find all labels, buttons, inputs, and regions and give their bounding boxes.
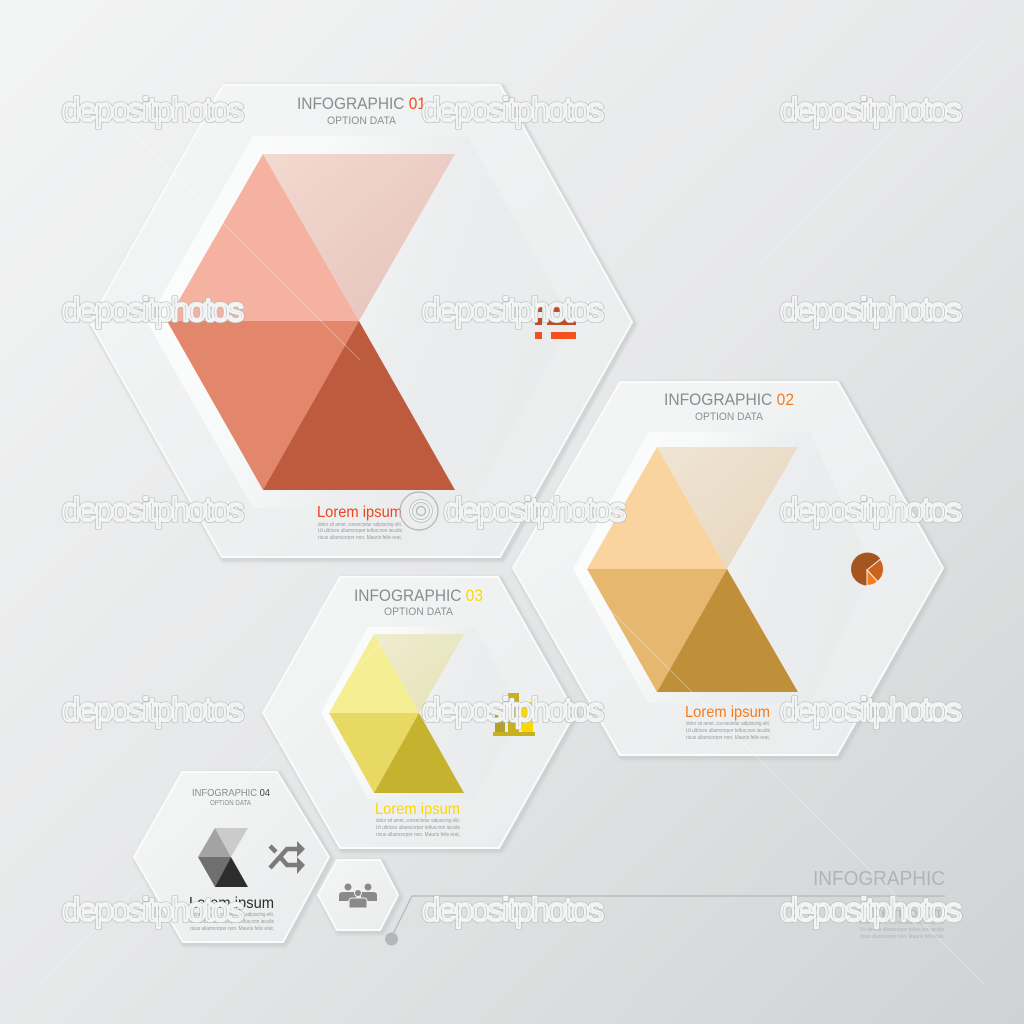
panel: infographic 01 [90, 85, 634, 559]
text block: infographic 01: risus ullamcorper non. Mauris felis erat, [318, 535, 402, 541]
icon: pie chart [851, 552, 884, 586]
panel: people hexagon [318, 860, 400, 932]
triangles: infographic 01 [167, 154, 455, 490]
subheading: infographic 02: OPTION DATA [695, 411, 764, 423]
heading: infographic 03: INFOGRAPHIC 03 [354, 586, 483, 605]
icon: shuffle arrows [270, 841, 305, 874]
text block: infographic 04 [189, 895, 274, 932]
subheading: infographic 01: OPTION DATA [327, 115, 397, 127]
text block: bottom right infographic: risus ullamcorper non. Mauris felis erat, [860, 934, 944, 940]
heading: infographic 02: INFOGRAPHIC 02 [664, 390, 794, 409]
text block: infographic 04: Ut ultrices ullamcorper tellus,non iaculis [190, 919, 274, 925]
text block: infographic 04: Lorem ipsum [189, 895, 274, 912]
text block: infographic 02: Ut ultrices ullamcorper tellus,non iaculis [686, 728, 770, 734]
heading: infographic 01: INFOGRAPHIC 01 [297, 94, 426, 113]
text block: infographic 03: dolor sit amet, consectetur adipiscing elit. [376, 818, 460, 824]
icon: bar chart [493, 693, 535, 736]
panel: infographic 04 [134, 772, 331, 944]
icon: list [535, 305, 576, 339]
text block: infographic 03: Ut ultrices ullamcorper tellus,non iaculis [376, 825, 460, 831]
text block: bottom right infographic: dolor sit amet, consectetur adipiscing elit. [860, 920, 944, 926]
text block: infographic 02: risus ullamcorper non. Mauris felis erat, [686, 735, 770, 741]
triangles: infographic 03 [329, 634, 464, 793]
text block: bottom right infographic: Lorem ipsum [860, 904, 945, 920]
text block: infographic 04: dolor sit amet, consectetur adipiscing elit. [190, 912, 274, 918]
text block: infographic 04: risus ullamcorper non. Mauris felis erat, [190, 926, 274, 932]
text block: infographic 02: dolor sit amet, consectetur adipiscing elit. [686, 721, 770, 727]
text block: infographic 02: Lorem ipsum [685, 704, 770, 721]
text block: infographic 03 [375, 801, 460, 838]
text block: infographic 03: risus ullamcorper non. Mauris felis erat, [376, 832, 460, 838]
triangles: infographic 02 [587, 447, 798, 692]
text block: infographic 01 [317, 504, 402, 541]
triangles: infographic 04 [198, 828, 248, 887]
panel: infographic 02 [513, 382, 945, 757]
text block: infographic 01: Lorem ipsum [317, 504, 402, 521]
text block: infographic 01: Ut ultrices ullamcorper tellus,non iaculis [318, 528, 402, 534]
text block: infographic 01: dolor sit amet, consectetur adipiscing elit. [318, 522, 402, 528]
text block: bottom right infographic: INFOGRAPHIC [813, 868, 945, 890]
panel: infographic 03 [263, 577, 577, 850]
text block: infographic 03: Lorem ipsum [375, 801, 460, 818]
text block: bottom right infographic [813, 868, 945, 940]
heading: infographic 04: INFOGRAPHIC 04 [192, 788, 270, 799]
watermark grid [62, 91, 962, 928]
text block: bottom right infographic: Ut ultrices ullamcorper tellus,non iaculis [860, 927, 944, 933]
connector line [385, 896, 945, 946]
icon: people [339, 884, 377, 908]
subheading: infographic 03: OPTION DATA [384, 606, 454, 618]
text block: infographic 02 [685, 704, 770, 741]
subheading: infographic 04: OPTION DATA [210, 800, 251, 807]
